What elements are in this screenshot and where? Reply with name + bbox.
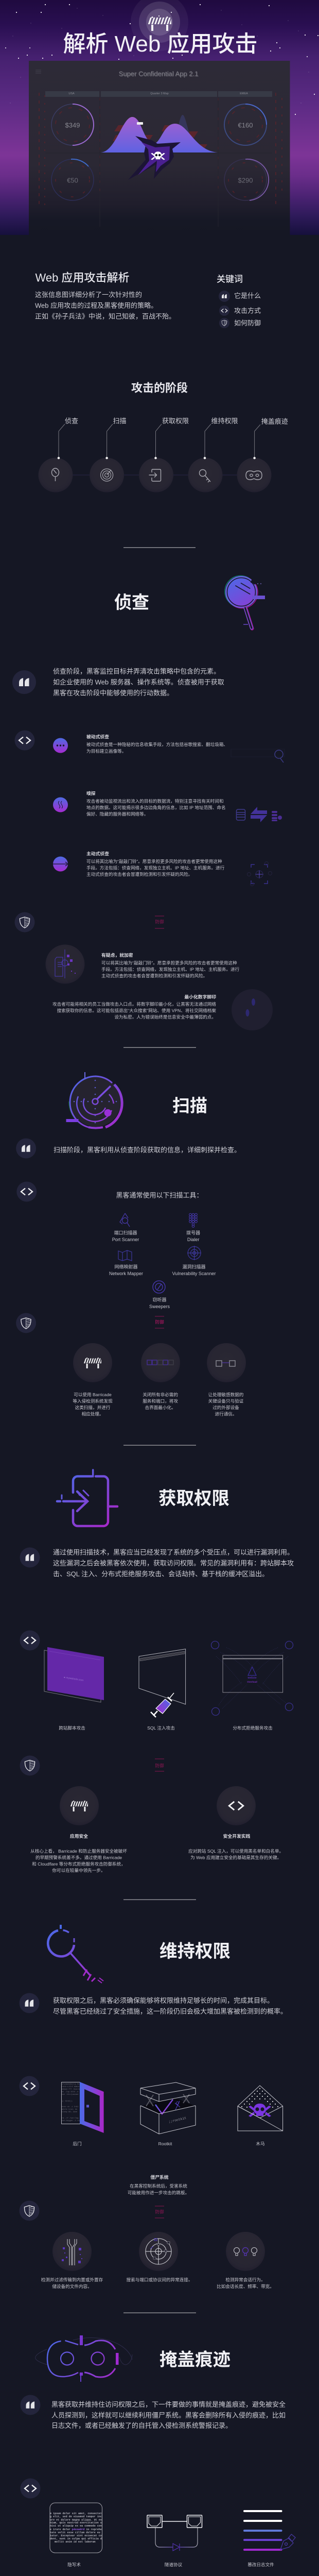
defense: content filtering: 检测并过滤传输到内置或外置存	[41, 2277, 103, 2282]
illustration: DDoS: Overload	[247, 1681, 257, 1683]
icon: door with arrow	[57, 1470, 117, 1526]
item: active recon: 手段。方法包括：侦查网络，发现独立主机、IP 地址、主机服务。进行	[86, 865, 225, 871]
illustration: steganography: ore et dolore magna aliqua. Ut en	[50, 2518, 102, 2521]
tool: dialer: Dialer	[187, 1237, 199, 1242]
item: active recon: 主动式侦查的攻击者会冒遭到检测和引发怀疑的风险。	[86, 871, 192, 877]
icon: mask	[36, 2335, 132, 2382]
tool: port scanner: Port Scanner	[112, 1237, 139, 1242]
icon: shield badge	[14, 912, 35, 933]
dashboard screen	[29, 61, 290, 235]
defense: encrypt: 有疑虑，就加密	[101, 952, 133, 958]
icon: key	[48, 1925, 103, 1983]
icon: skull splat	[128, 136, 181, 180]
item: passive recon: 被动式侦查	[86, 734, 109, 739]
zombie systems text: 在黑客控制系统后，受害系统	[130, 2183, 187, 2189]
tool: port scanner: 端口扫描器	[114, 1230, 137, 1235]
defense: close ports	[141, 1343, 180, 1410]
item: passive recon: 被动式侦查是一种隐秘的信息收集手段，方法包括谷歌搜索、翻垃圾箱、	[86, 741, 228, 747]
defense: encrypt: 主动式侦查的攻击者会冒遭到检测和引发怀疑的风险。	[101, 973, 207, 978]
illustration: backdoor: sleep 60; done	[62, 2111, 77, 2113]
section: scanning	[16, 1072, 246, 1417]
zombie systems text: 可能被用作进一步攻击的跳板。	[128, 2190, 189, 2195]
defense: secure development: 应对跨站 SQL 注入，可以使用黑名单和白名单。	[188, 1848, 283, 1854]
defense: minimize footprint	[52, 989, 273, 1030]
table header band: Quarter 3 Map	[150, 92, 169, 95]
icon: search box	[231, 749, 285, 762]
defense: minimize footprint: 攻击者可能将相关的员工当做攻击入口点。将数字脚印最小化，让黑客无法通过网络	[52, 1001, 216, 1007]
intro paragraph: Web 应用攻击的过程及黑客使用的策略。	[35, 302, 157, 309]
defense: verified devices	[207, 1343, 246, 1417]
icon: syringe	[151, 1693, 174, 1717]
heading: recon: 侦查	[114, 593, 149, 613]
icon: network scan	[247, 861, 272, 886]
item: sniffing: 嗅探	[86, 790, 96, 796]
illustration: steganography: e irure dolor p4ssw0rd in reprehe	[50, 2528, 102, 2531]
tool: dialer	[186, 1213, 200, 1242]
defense: application security: 的早期预警系统差不多。通过使用 Barricade	[36, 1855, 122, 1860]
defense: abnormal sessions	[217, 2232, 274, 2289]
illustration: XSS	[44, 1647, 104, 1731]
phase: recon: 侦查	[65, 417, 78, 425]
defense tag	[16, 1313, 164, 1333]
illustration: steganography: nisi ut aliquip ex ea commodo con	[50, 2524, 102, 2528]
metric ring: USA	[51, 104, 94, 145]
icon: shield badge	[16, 1313, 36, 1333]
metric ring: EMEA: €160	[238, 122, 253, 129]
intro paragraph: 这张信息图详细分析了一次针对性的	[35, 291, 142, 299]
zombie systems text	[128, 2174, 189, 2195]
illustration: backdoor: rm -rf /var/log	[62, 2117, 78, 2120]
what it is: recon: 黑客在攻击阶段中能够使用的行动数据。	[53, 689, 173, 697]
illustration: tunneling	[147, 2515, 202, 2567]
illustration: steganography: dent, sunt in culpa qui officia d	[50, 2537, 102, 2540]
defense: secure development: 安全开发实践	[223, 1833, 251, 1839]
defense: barricade IDS: 这类扫描，并进行	[75, 1404, 111, 1410]
illustration: backdoor	[62, 2082, 104, 2146]
item: active recon	[53, 851, 225, 877]
defense: barricade IDS	[73, 1343, 113, 1417]
defense: abnormal connections: 搜索与端口或协议间的异常连接。	[127, 2277, 192, 2282]
defense: close ports: 关闭所有非必需的	[143, 1392, 178, 1397]
illustration: log tampering	[243, 2510, 295, 2567]
tool: sweepers: Sweepers	[149, 1304, 170, 1309]
icon: code badge	[14, 731, 35, 750]
item: active recon: 可以将其比喻为“敲敲门铃”。愿意承担更多风险的攻击者更常使用这种	[86, 858, 222, 864]
what it is: recon: 如企业使用的 Web 服务器、操作系统等。侦查被用于获取	[53, 678, 224, 686]
defense: application security: 你可以在较量中领先一步。	[52, 1867, 105, 1873]
illustration: backdoor: while true; do	[62, 2108, 77, 2111]
intro heading: Web 应用攻击解析	[35, 271, 129, 284]
what it is: gaining access	[20, 1548, 294, 1578]
defense: abnormal sessions: 检测异常会话行为。	[225, 2277, 265, 2282]
legend item: what it is: 它是什么	[234, 292, 261, 300]
illustration: steganography: g elit, sed do eiusmod tempor inc	[50, 2515, 102, 2518]
illustration: steganography	[50, 2503, 102, 2567]
illustration: backdoor: if(backdoor){ 0x7f	[62, 2083, 82, 2086]
illustration: steganography: iatur. Excepteur sint occaecat cu	[50, 2534, 102, 2537]
phase: cover tracks	[237, 417, 288, 493]
defense tag	[14, 912, 164, 933]
illustration: rootkit	[140, 2082, 196, 2146]
illustration: tunneling: 隧道协议	[165, 2562, 183, 2567]
item: sniffing: 地点的数据。这可能揭示很多边边角角的信息，比如 IP 地址范围、命名	[86, 805, 226, 810]
illustration: steganography: 隐写术	[67, 2562, 81, 2567]
heading: covering tracks: 掩盖痕迹	[160, 2350, 231, 2370]
heading: scanning: 扫描	[172, 1096, 207, 1116]
illustration: steganography: m ipsum dolor sit amet, consectet	[50, 2512, 102, 2515]
intro paragraph	[35, 291, 175, 320]
phase: cover tracks: 掩盖痕迹	[261, 417, 288, 426]
defense: verified devices: 过的外部设备	[212, 1404, 239, 1410]
illustration: backdoor: nc -lvp 4444 -e	[62, 2091, 78, 2093]
phase: recon	[38, 417, 78, 493]
metric ring: EMEA	[224, 104, 267, 145]
what it is: maintaining access: 尽管黑客已经绕过了安全措施，这一阶段仍旧会极大增加黑客被检测到的概率。	[53, 2007, 287, 2015]
defense: secure development: 为 Web 应用建立安全的基础是其生存的关键。	[190, 1855, 281, 1860]
illustration: DDoS	[211, 1641, 293, 1731]
what it is: covering tracks: 人员探测到，这样就可以继续利用僵尸系统。黑客会删除所有入侵的痕迹，比如	[51, 2411, 286, 2419]
defense: application security: 和 Cloudflare 等分布式拒绝服务攻击防御系统，	[32, 1861, 126, 1867]
tool: dialer: 拨号器	[186, 1230, 200, 1235]
illustration: trojan	[238, 2086, 283, 2146]
heading: attack phases: 攻击的阶段	[131, 381, 188, 395]
illustration: rootkit: ;;rootkit	[168, 2116, 187, 2124]
defense: application security: 应用安全	[70, 1833, 88, 1839]
defense: content filtering: 储设备的文件内容。	[52, 2283, 92, 2289]
defense: minimize footprint: 最小化数字脚印	[184, 994, 216, 999]
section: maintaining access	[20, 1925, 287, 2289]
illustration: trojan: 木马	[256, 2141, 265, 2146]
section: covering tracks	[16, 2335, 295, 2576]
defense: minimize footprint: 设为私密。人为错误始终是信息安全中最薄弱的点。	[114, 1014, 216, 1020]
illustration: steganography: niam, quis nostrud exercitation u	[50, 2521, 102, 2524]
illustration: rootkit: Rootkit	[158, 2141, 172, 2146]
phase: gain access: 获取权限	[162, 417, 189, 425]
illustration: XSS: ● mywebsite.com	[63, 1676, 84, 1682]
legend item: attack methods: 攻击方式	[234, 307, 261, 314]
illustration: SQL injection: SQL 注入攻击	[147, 1725, 175, 1731]
tool: network mapper: Network Mapper	[109, 1271, 143, 1276]
defense: barricade IDS: 可以使用 Barricade	[74, 1392, 112, 1397]
metric ring: USA: $349	[65, 122, 80, 129]
defense: secure development	[188, 1786, 283, 1860]
icon: data transfer	[237, 807, 282, 822]
what it is: maintaining access: 获取权限之后，黑客必须确保能够将权限维持足够长的时间，完成其目标。	[53, 1997, 274, 2004]
phase: scan	[90, 417, 127, 493]
legend heading: 关键词	[217, 274, 243, 284]
illustration: backdoor: ssh-keygen -t rsa	[62, 2120, 81, 2122]
defense: application security	[30, 1786, 127, 1873]
defense: minimize footprint: 搜索获取你的信息。这可能包括退出“大众搜索”网站、使用 VPN、将社交网络档案	[57, 1008, 216, 1013]
tool: network mapper	[109, 1250, 143, 1276]
defense: verified devices: 进行通信。	[215, 1411, 237, 1417]
icon: radar	[66, 1072, 122, 1128]
tool: vulnerability scanner: Vulnerability Scanner	[172, 1271, 216, 1276]
illustration: DDoS: Website	[247, 1676, 257, 1679]
what it is: gaining access: 这些漏洞之后会被黑客依次使用，获取访问权限。常见的漏洞利用有：跨站脚本攻	[53, 1559, 294, 1567]
table header band: EMEA	[240, 92, 248, 95]
illustration: backdoor: chmod 777 /bin/sh	[62, 2088, 81, 2091]
section: gaining access	[20, 1470, 294, 1873]
icon: shield badge	[20, 2201, 39, 2221]
defense: verified devices: 让处理敏感数据的	[208, 1392, 243, 1397]
table header band	[45, 91, 272, 97]
defense: abnormal connections	[127, 2232, 192, 2282]
what it is: gaining access: 通过使用扫描技术，黑客应当已经发现了系统的多个受压点，可以进行漏洞利用。	[53, 1549, 294, 1556]
heading: gaining access: 获取权限	[158, 1489, 229, 1509]
illustration: backdoor: cat /etc/passwd	[62, 2093, 78, 2096]
tool: sweepers	[149, 1281, 170, 1309]
what it is: covering tracks: 黑客获取并维持住访问权限之后，下一件要做的事情就是掩盖痕迹，避免被安全	[51, 2401, 286, 2408]
header banner	[0, 0, 319, 235]
phase: scan: 扫描	[113, 417, 127, 425]
icon: code badge	[21, 2478, 40, 2499]
defense: close ports: 击界面最小化。	[145, 1404, 176, 1410]
metric ring: bottom left	[51, 159, 94, 200]
tool: vulnerability scanner	[172, 1246, 216, 1276]
what it is: recon	[12, 668, 224, 697]
what it is: recon: 侦查阶段，黑客监控目标并弄清攻击策略中包含的元素。	[53, 668, 220, 675]
illustration: SQL injection	[139, 1649, 186, 1731]
table header band: USA	[68, 92, 75, 95]
phase: gain access	[139, 417, 189, 493]
phase: maintain access	[188, 417, 238, 493]
screen title: Super Confidential App 2.1	[119, 70, 199, 78]
zombie systems text: 僵尸系统	[150, 2174, 169, 2180]
intro text block	[35, 271, 175, 320]
tool: sweepers: 窃听器	[152, 1297, 167, 1302]
defense tag	[20, 2201, 164, 2221]
icon: shield badge	[20, 1756, 40, 1775]
item: active recon: 主动式侦查	[86, 851, 109, 856]
phase timeline	[38, 417, 288, 493]
area chart	[101, 115, 218, 152]
tool: vulnerability scanner: 漏洞扫描器	[182, 1264, 206, 1269]
illustration: XSS: 跨站脚本攻击	[59, 1725, 85, 1731]
section: reconnaissance	[12, 576, 285, 1030]
illustration: log tampering: 篡改日志文件	[247, 2562, 274, 2567]
defense: encrypt	[45, 945, 240, 984]
tools intro: 黑客通常使用以下扫描工具：	[116, 1191, 203, 1199]
defense: barricade IDS: 等入侵检测系统发现	[73, 1398, 113, 1403]
starfield	[5, 4, 318, 115]
item: sniffing	[53, 790, 226, 817]
what it is: gaining access: 击、SQL 注入、分布式拒绝服务攻击、会话劫持、基于栈的缓冲区溢出。	[53, 1570, 269, 1578]
defense: verified devices: 关键设备只与验证	[208, 1398, 244, 1403]
defense tag: 防御	[155, 919, 164, 924]
defense: application security: 从核心上看， Barricade 和防止服务器安全被破坏	[30, 1848, 127, 1854]
screen title	[36, 70, 199, 78]
metric ring: bottom right	[224, 159, 269, 200]
icon: code badge	[20, 1630, 40, 1651]
defense tag	[20, 1756, 164, 1775]
defense: encrypt: 可以将其比喻为“敲敲门铃”。愿意承担更多风险的攻击者更常使用这种	[101, 960, 237, 965]
defense tag: 防御	[155, 1762, 164, 1768]
what it is: scanning	[16, 1139, 241, 1158]
item: passive recon: 为目标建立画像等。	[86, 748, 126, 754]
illustration: backdoor: }; bind();	[62, 2100, 73, 2103]
illustration: steganography: tate velit esse cillum dolore eu	[50, 2531, 100, 2534]
screen title: Super Confidential App 2.1	[119, 70, 198, 77]
what it is: maintaining access	[20, 1993, 287, 2015]
illustration: DDoS: 分布式拒绝服务攻击	[233, 1725, 273, 1731]
legend item: how to defend: 如何防御	[234, 319, 261, 327]
defense: barricade IDS: 相应处理。	[82, 1411, 103, 1417]
defense tag: 防御	[155, 2209, 164, 2214]
item: sniffing: 攻击者被动监视流出和流入的目标的数据流，特别注意寻找有关时间和	[86, 798, 223, 804]
intro paragraph: 正如《孙子兵法》中说，知己知彼，百战不殆。	[35, 312, 175, 320]
metric ring: bottom right: $290	[238, 176, 253, 184]
phase: maintain access: 维持权限	[211, 417, 238, 425]
defense tag: 防御	[155, 1319, 164, 1325]
tool: network mapper: 网络映射器	[114, 1264, 138, 1269]
illustration: backdoor: exec sh -i 2>&1	[62, 2106, 78, 2108]
icon: glowing barricade	[131, 0, 188, 51]
defense: encrypt: 手段。方法包括：侦查网络，发现独立主机、IP 地址、主机服务。进行	[101, 967, 240, 972]
item: passive recon	[53, 734, 228, 754]
defense: close ports: 服务和端口，将攻	[143, 1398, 178, 1403]
defense: abnormal sessions: 比如会话长度、频率、带宽。	[217, 2283, 274, 2289]
keyword legend	[217, 274, 261, 328]
title: 解析 Web 应用攻击	[63, 31, 258, 57]
defense: content filtering	[41, 2232, 103, 2289]
heading: maintaining access: 维持权限	[160, 1942, 231, 1961]
what it is: covering tracks	[21, 2395, 286, 2430]
icon: code badge	[16, 1182, 37, 1201]
icon: code badge	[20, 2076, 39, 2096]
what it is: covering tracks: 日志文件，或者已经触发了的自托管入侵检测系统警报记录。	[51, 2421, 232, 2430]
illustration: backdoor: 后门	[73, 2141, 82, 2146]
icon: magnifier	[225, 576, 265, 629]
illustration: backdoor: root:x:0:0 admin:	[62, 2086, 81, 2088]
illustration: steganography: mollit anim id est laborum	[55, 2540, 95, 2544]
item: sniffing: 偏好、隐藏的服务器和网络等。	[86, 811, 148, 817]
what it is: scanning: 扫描阶段，黑客利用从侦查阶段获取的信息，详细刺探并检查。	[54, 1146, 241, 1154]
tool: port scanner	[112, 1213, 139, 1242]
metric ring: bottom left: €50	[67, 176, 78, 184]
